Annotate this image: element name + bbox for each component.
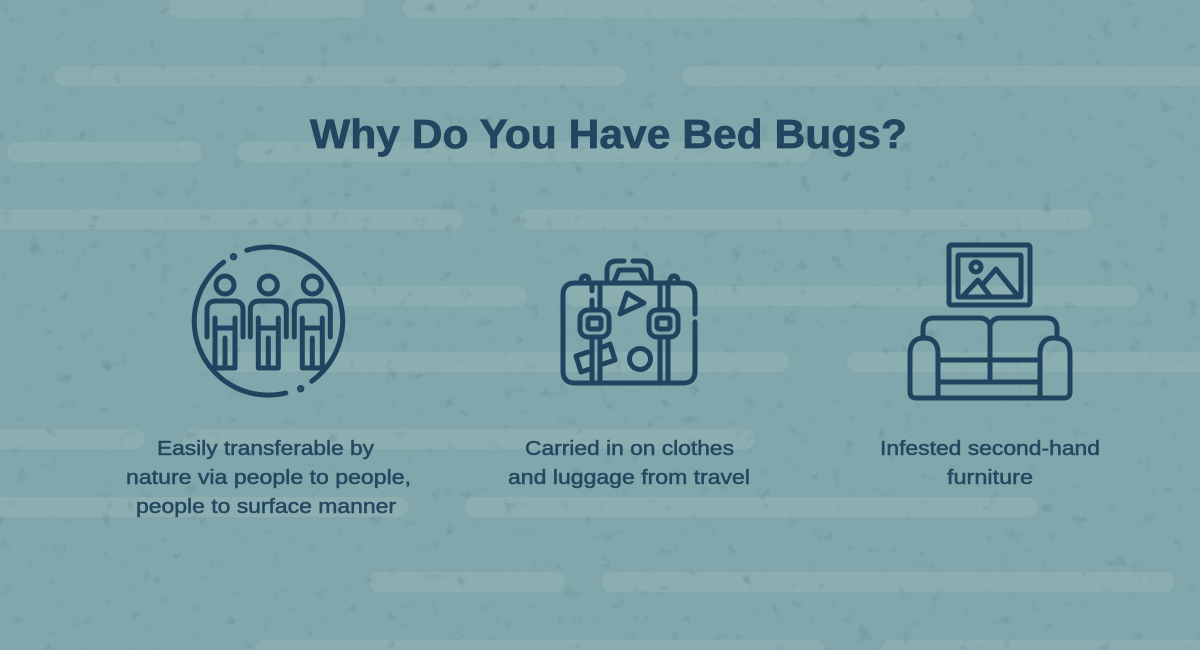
column: furniture: [880, 245, 1100, 489]
caption: luggage: [508, 438, 750, 489]
caption: furniture: furniture: [947, 467, 1033, 489]
caption: furniture: [880, 438, 1100, 489]
caption: people: Easily transferable by: [157, 438, 374, 460]
caption: people: nature via people to people,: [126, 467, 411, 489]
caption: luggage: Carried in on clothes: [525, 438, 734, 460]
icon: picture and sofa: [910, 245, 1070, 398]
column: luggage: [508, 261, 750, 489]
caption: people: [126, 438, 411, 518]
caption: people: people to surface manner: [136, 496, 396, 518]
caption: luggage: and luggage from travel: [508, 467, 750, 489]
icon: three people in circle: [194, 247, 343, 395]
caption: furniture: Infested second-hand: [880, 438, 1100, 460]
icon: suitcase: [563, 261, 695, 383]
title: Why Do You Have Bed Bugs?: [310, 111, 907, 157]
column: people transfer: [126, 247, 411, 518]
